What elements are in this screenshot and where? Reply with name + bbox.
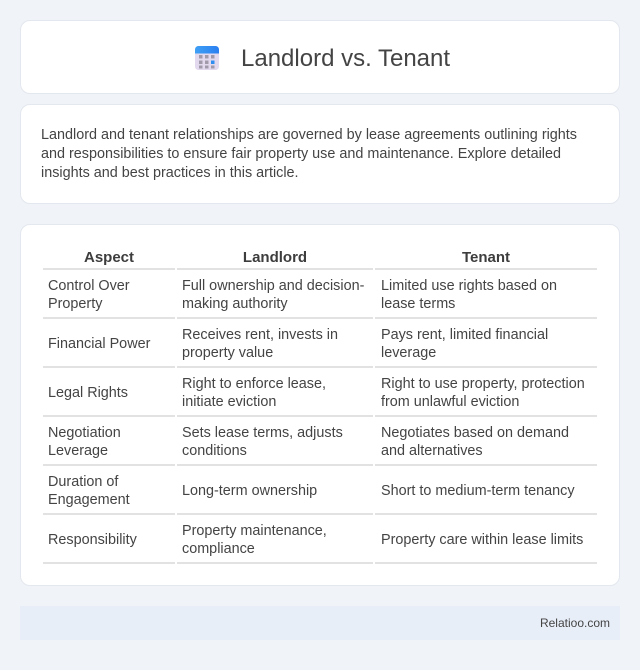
row: legal rights: Legal Rights <box>48 385 128 401</box>
header: Landlord: Landlord <box>243 249 307 266</box>
landlord: control: making authority <box>182 296 288 312</box>
landlord: responsibility: compliance <box>182 541 255 557</box>
intro text: Landlord and tenant relationships are governed by lease agreements outlining rights <box>41 126 577 142</box>
row: control over property: Property <box>48 296 102 312</box>
icon: calendar <box>195 46 219 70</box>
landlord: negotiation <box>182 425 343 459</box>
tenant: responsibility: Property care within lease limits <box>381 532 583 548</box>
tenant: control: Limited use rights based on <box>381 278 557 294</box>
tenant: control: lease terms <box>381 296 455 312</box>
intro text: and responsibilities to ensure fair property use and maintenance. Explore detailed <box>41 146 561 162</box>
footer bar <box>20 606 620 640</box>
landlord: financial: Receives rent, invests in <box>182 327 338 343</box>
landlord: negotiation: Sets lease terms, adjusts <box>182 425 343 441</box>
landlord: control: Full ownership and decision- <box>182 278 364 294</box>
row: duration of engagement: Duration of <box>48 474 118 490</box>
row: control over property <box>48 278 130 312</box>
row: duration of engagement <box>48 474 130 508</box>
landlord: legal <box>182 376 326 410</box>
tenant: financial: Pays rent, limited financial <box>381 327 548 343</box>
row: control over property: Control Over <box>48 278 130 294</box>
row: financial power: Financial Power <box>48 336 150 352</box>
tenant: legal: from unlawful eviction <box>381 394 519 410</box>
panel: title card <box>20 20 620 94</box>
tenant: legal <box>381 376 585 410</box>
landlord: duration: Long-term ownership <box>182 483 317 499</box>
landlord: responsibility <box>182 523 327 557</box>
row: duration of engagement: Engagement <box>48 492 130 508</box>
landlord: financial: property value <box>182 345 273 361</box>
tenant: financial: leverage <box>381 345 436 361</box>
header: Aspect: Aspect <box>84 249 134 266</box>
intro text <box>41 126 577 181</box>
landlord: control <box>182 278 364 312</box>
tenant: financial <box>381 327 548 361</box>
tenant: negotiation: and alternatives <box>381 443 483 459</box>
intro text: insights and best practices in this article. <box>41 165 299 181</box>
landlord: legal: Right to enforce lease, <box>182 376 326 392</box>
header: Tenant: Tenant <box>462 249 510 266</box>
row: negotiation leverage: Negotiation <box>48 425 121 441</box>
tenant: legal: Right to use property, protection <box>381 376 585 392</box>
tenant: control <box>381 278 557 312</box>
tenant: negotiation <box>381 425 569 459</box>
title: Landlord vs. Tenant <box>241 45 450 72</box>
landlord: negotiation: conditions <box>182 443 247 459</box>
landlord: financial <box>182 327 338 361</box>
panel: comparison table card <box>20 224 620 586</box>
row: responsibility: Responsibility <box>48 532 137 548</box>
landlord: legal: initiate eviction <box>182 394 276 410</box>
row: negotiation leverage: Leverage <box>48 443 108 459</box>
comparison table <box>43 248 597 564</box>
tenant: duration: Short to medium-term tenancy <box>381 483 575 499</box>
row: negotiation leverage <box>48 425 121 459</box>
footer text: source: Relatioo.com <box>540 616 610 630</box>
panel: introduction card <box>20 104 620 204</box>
landlord: responsibility: Property maintenance, <box>182 523 327 539</box>
tenant: negotiation: Negotiates based on demand <box>381 425 569 441</box>
